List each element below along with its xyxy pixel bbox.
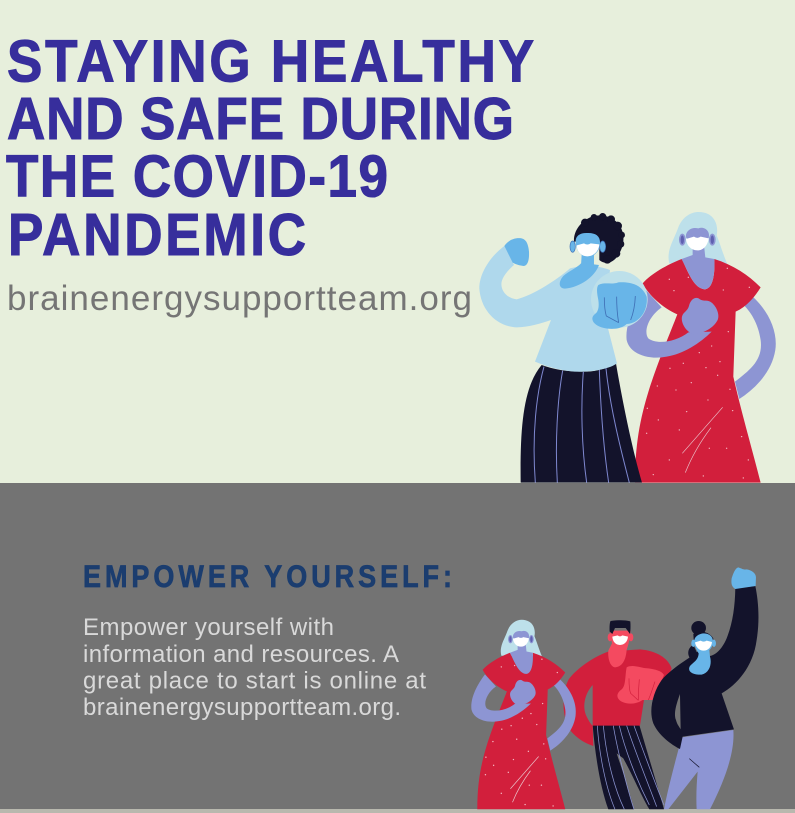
figure: woman with raised fist bbox=[651, 567, 758, 809]
title: AND SAFE DURING bbox=[7, 85, 514, 152]
body text: Empower yourself with bbox=[83, 614, 334, 641]
figure: woman in red dress bbox=[626, 212, 776, 483]
website url: brainenergysupportteam.org bbox=[7, 279, 472, 318]
title: STAYING HEALTHY bbox=[7, 28, 534, 94]
figure: woman in red dress bbox=[471, 620, 576, 809]
bottom strip bbox=[0, 809, 795, 813]
figure: man in red sweater bbox=[564, 620, 672, 809]
body text: information and resources. A bbox=[83, 641, 399, 668]
panel: bottom section background bbox=[0, 483, 795, 809]
title: PANDEMIC bbox=[8, 201, 306, 268]
body text: great place to start is online at bbox=[83, 668, 426, 694]
panel: top section background bbox=[0, 0, 795, 483]
figure: woman in blue sweater bbox=[479, 213, 648, 483]
body text: brainenergysupportteam.org. bbox=[83, 694, 401, 721]
illustration: three people in masks bbox=[471, 567, 758, 809]
body text bbox=[83, 614, 426, 721]
title bbox=[6, 28, 534, 268]
heading: empower yourself: EMPOWER YOURSELF: bbox=[83, 559, 452, 595]
illustration: two women in masks bbox=[479, 212, 776, 483]
title: THE COVID-19 bbox=[6, 143, 388, 209]
